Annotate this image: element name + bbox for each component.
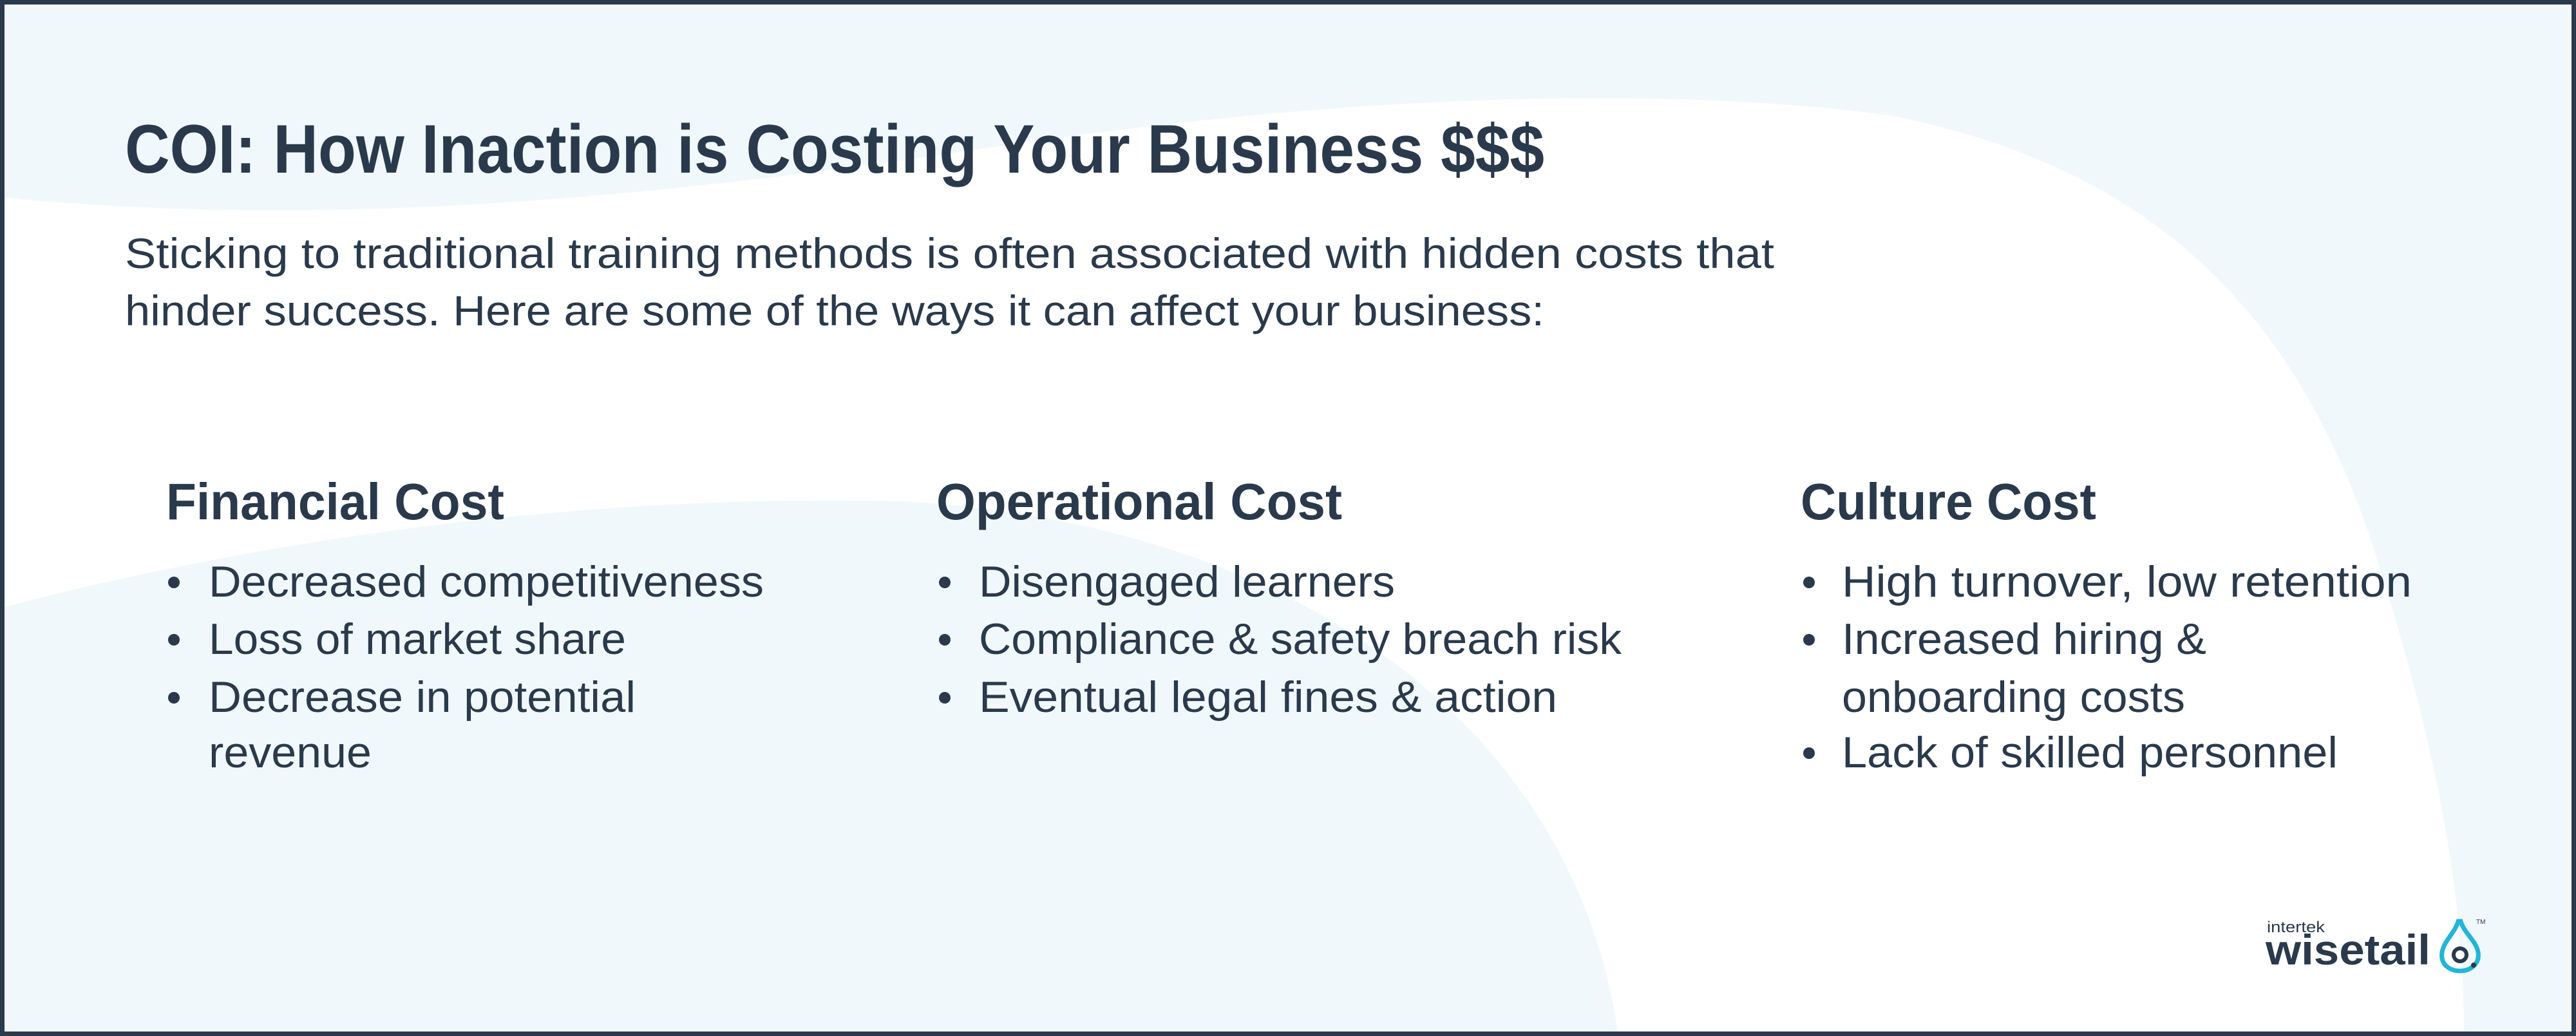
intro text [125,229,1774,334]
logo: intertek wisetail: TM [2476,919,2485,926]
panel: financial cost: Decreased competitiveness [209,557,764,606]
title: COI: How Inaction is Costing Your Business $$$ [125,110,1544,187]
panel: financial cost [166,473,764,777]
panel: financial cost: Decrease in potential [209,673,636,722]
panel: operational cost: Eventual legal fines & action [979,673,1557,722]
panel: culture cost [1801,473,2412,777]
panel: financial cost: Loss of market share [209,615,626,664]
panel: operational cost: Disengaged learners [979,557,1395,606]
panel: culture cost: Culture Cost [1801,473,2096,530]
panel: culture cost: Lack of skilled personnel [1842,728,2338,777]
panel: operational cost [936,473,1622,722]
panel: culture cost: onboarding costs [1842,673,2185,722]
icon: drop [2442,921,2478,971]
logo: intertek wisetail [2265,919,2485,974]
panel: financial cost: Financial Cost [166,473,504,530]
logo: intertek wisetail: intertek [2267,919,2325,936]
intro text: Sticking to traditional training methods is often associated with hidden costs that [125,229,1774,277]
logo: intertek wisetail: wisetail [2265,926,2430,974]
panel: operational cost: Compliance & safety breach risk [979,615,1622,664]
panel: culture cost: Increased hiring & [1842,615,2206,664]
panel: culture cost: High turnover, low retention [1842,557,2412,606]
intro text: hinder success. Here are some of the ways it can affect your business: [125,287,1544,334]
panel: financial cost: revenue [209,728,372,777]
panel: operational cost: Operational Cost [936,473,1342,530]
